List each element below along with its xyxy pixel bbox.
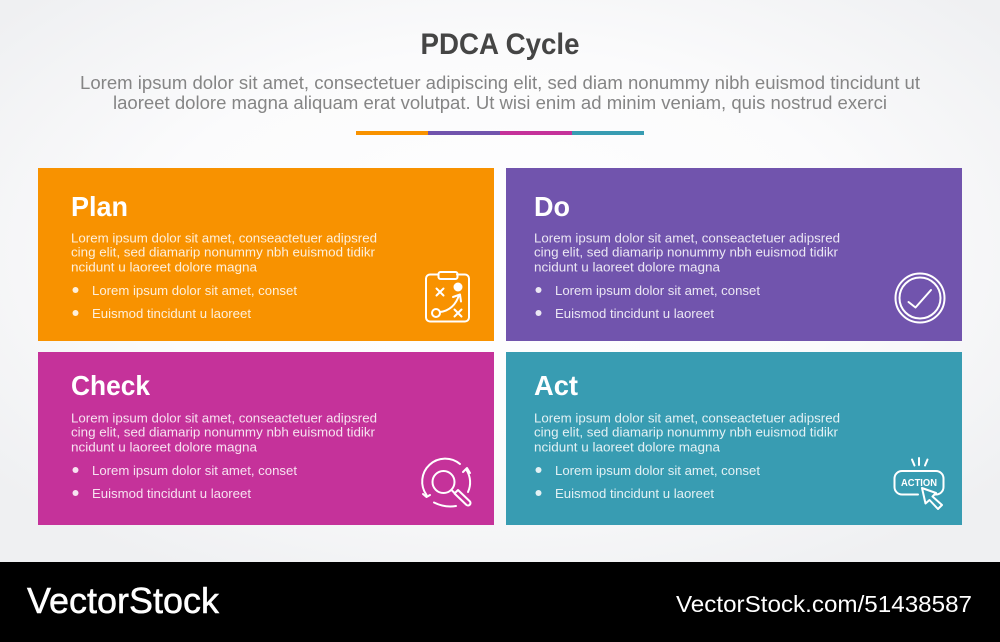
text block: Check description <box>71 412 377 454</box>
text block: Check description: cing elit, sed diamarip nonummy nbh euismod tidikr <box>71 426 375 440</box>
bullet list: Do: Euismod tincidunt u laoreet <box>555 307 715 321</box>
text block: Do description <box>534 232 840 274</box>
text block: Do description: ncidunt u laoreet dolore magna <box>534 260 720 274</box>
text block: Plan description <box>71 232 377 274</box>
bullet list: Check: Euismod tincidunt u laoreet <box>92 487 252 501</box>
icon: check mark in circle <box>896 274 944 322</box>
bullet list: Act: Lorem ipsum dolor sit amet, conset <box>555 464 761 478</box>
heading: Plan: Plan <box>71 191 128 222</box>
bullet list: Do <box>536 284 761 321</box>
text block: Plan description: ncidunt u laoreet dolore magna <box>71 260 257 274</box>
text block: Act description: ncidunt u laoreet dolore magna <box>534 440 720 454</box>
bullet list: Plan <box>72 284 298 321</box>
heading: Check: Check <box>71 370 150 401</box>
heading: Act: Act <box>534 370 578 401</box>
text block: Do description: cing elit, sed diamarip nonummy nbh euismod tidikr <box>534 246 838 260</box>
icon: magnifier with cycle arrows <box>422 459 470 506</box>
panel: Act <box>506 352 962 525</box>
subtitle text block: laoreet dolore magna aliquam erat volutpat. Ut wisi enim ad minim veniam, quis nostrud exerci <box>113 93 887 113</box>
panel: Check <box>38 352 494 525</box>
image id url: VectorStock.com/51438587 <box>676 591 972 617</box>
text block: Check description: Lorem ipsum dolor sit amet, conseactetuer adipsred <box>71 412 377 426</box>
text block: Act description: cing elit, sed diamarip nonummy nbh euismod tidikr <box>534 426 838 440</box>
bullet list: Plan: Euismod tincidunt u laoreet <box>92 307 252 321</box>
icon: action button with cursor: ACTION <box>901 477 937 489</box>
bullet list: Plan: Lorem ipsum dolor sit amet, conset <box>92 284 298 298</box>
text block: Plan description: cing elit, sed diamarip nonummy nbh euismod tidikr <box>71 246 375 260</box>
colour divider <box>356 131 644 135</box>
icon: action button with cursor <box>894 458 944 509</box>
text block: Act description <box>534 412 840 454</box>
panel: Plan <box>38 168 494 341</box>
bullet list: Check: Lorem ipsum dolor sit amet, conset <box>92 464 298 478</box>
bullet list: Do: Lorem ipsum dolor sit amet, conset <box>555 284 761 298</box>
bullet list: Act: Euismod tincidunt u laoreet <box>555 487 715 501</box>
subtitle text block: Lorem ipsum dolor sit amet, consectetuer adipiscing elit, sed diam nonummy nibh euismod tincidunt ut <box>80 73 920 93</box>
text block: Plan description: Lorem ipsum dolor sit amet, conseactetuer adipsred <box>71 232 377 246</box>
bullet list: Check <box>72 464 298 501</box>
panel: Do <box>506 168 962 341</box>
text block: Check description: ncidunt u laoreet dolore magna <box>71 440 257 454</box>
text block: Act description: Lorem ipsum dolor sit amet, conseactetuer adipsred <box>534 412 840 426</box>
brand logo text: VectorStock <box>27 580 220 621</box>
title: PDCA Cycle <box>420 28 580 61</box>
subtitle text block <box>80 73 920 113</box>
text block: Do description: Lorem ipsum dolor sit amet, conseactetuer adipsred <box>534 232 840 246</box>
bullet list: Act <box>536 464 761 501</box>
watermark footer bar <box>0 562 1000 642</box>
heading: Do: Do <box>534 191 570 222</box>
icon: clipboard strategy <box>426 272 469 322</box>
